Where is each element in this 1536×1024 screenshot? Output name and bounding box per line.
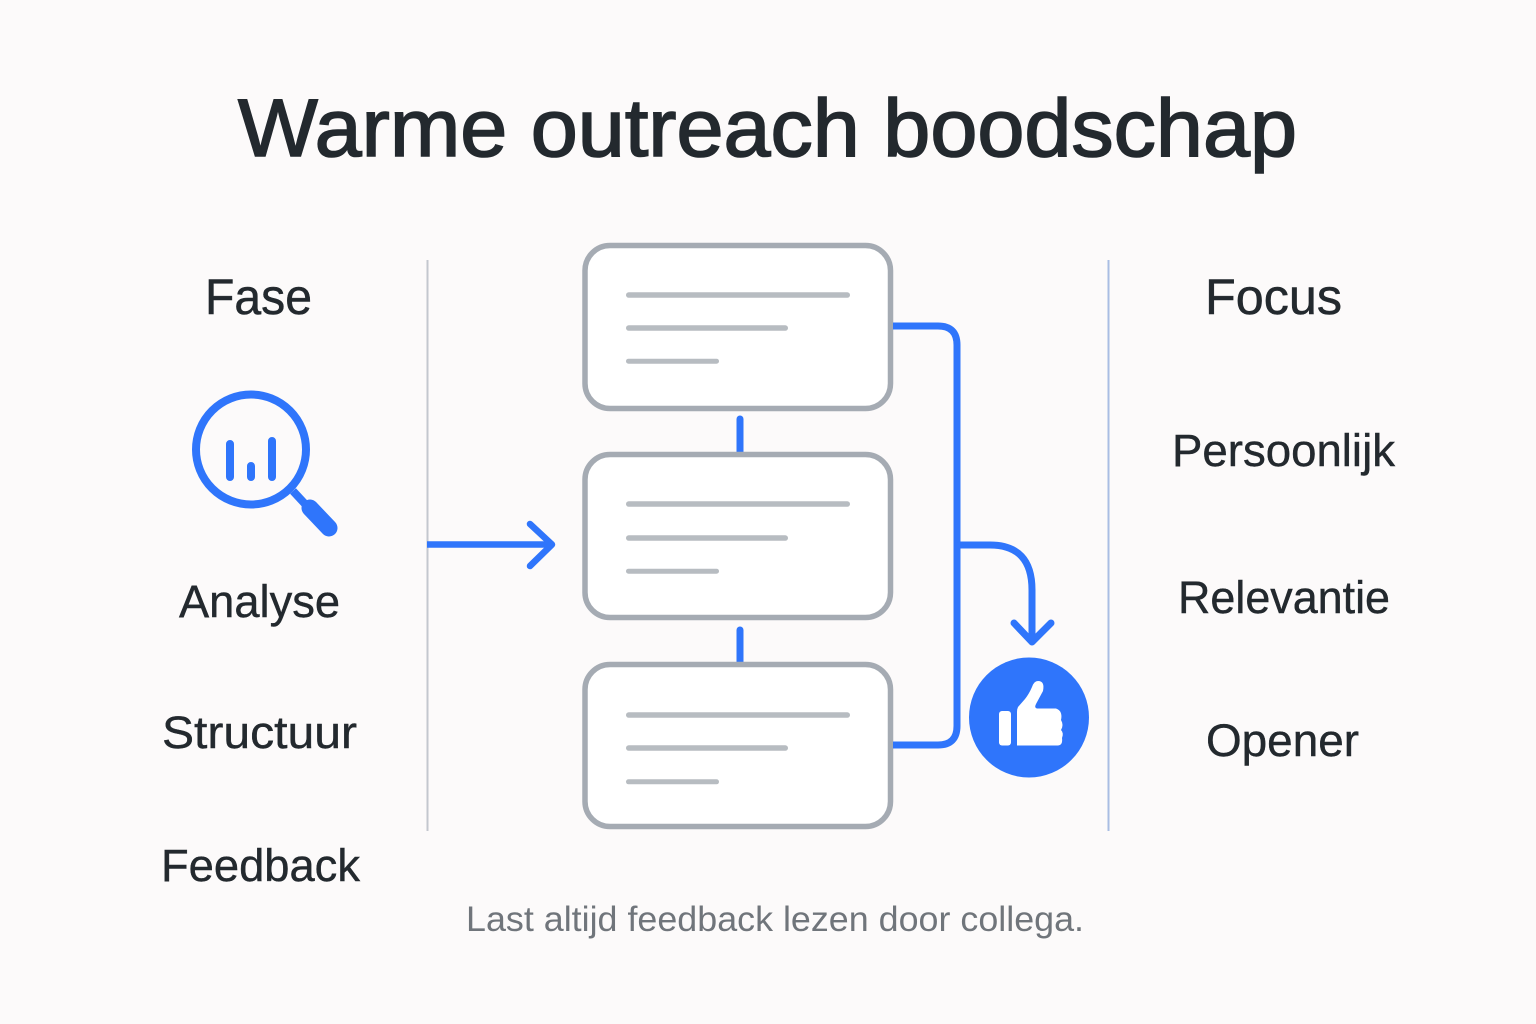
caption: Last altijd feedback lezen door collega. [466, 900, 1084, 939]
label: Opener: Opener [1206, 715, 1359, 766]
label: Analyse: Analyse [179, 576, 340, 627]
connector: card 2 to card 3 [736, 630, 744, 662]
icon: thumbs up [969, 658, 1089, 778]
icon: magnifier with bars [196, 394, 329, 528]
heading: Focus: Focus [1205, 269, 1342, 325]
card 3 [585, 664, 890, 826]
label: Relevantie: Relevantie [1178, 572, 1390, 623]
label: Feedback: Feedback [161, 840, 361, 891]
column: Focus [1172, 269, 1395, 766]
divider right [1108, 260, 1110, 831]
title: Warme outreach boodschap [238, 83, 1297, 174]
card 2 [585, 454, 890, 618]
connector: card 1 to card 2 [736, 419, 744, 452]
bracket: cards to feedback line [893, 326, 957, 745]
column: Fase [161, 269, 361, 891]
card 1 [585, 246, 890, 408]
label: Structuur: Structuur [162, 707, 357, 758]
arrow: down to thumbs up [960, 545, 1051, 642]
label: Persoonlijk: Persoonlijk [1172, 425, 1395, 476]
arrow: into message stack [427, 524, 552, 566]
divider left [426, 260, 428, 831]
heading: Fase: Fase [205, 269, 312, 325]
